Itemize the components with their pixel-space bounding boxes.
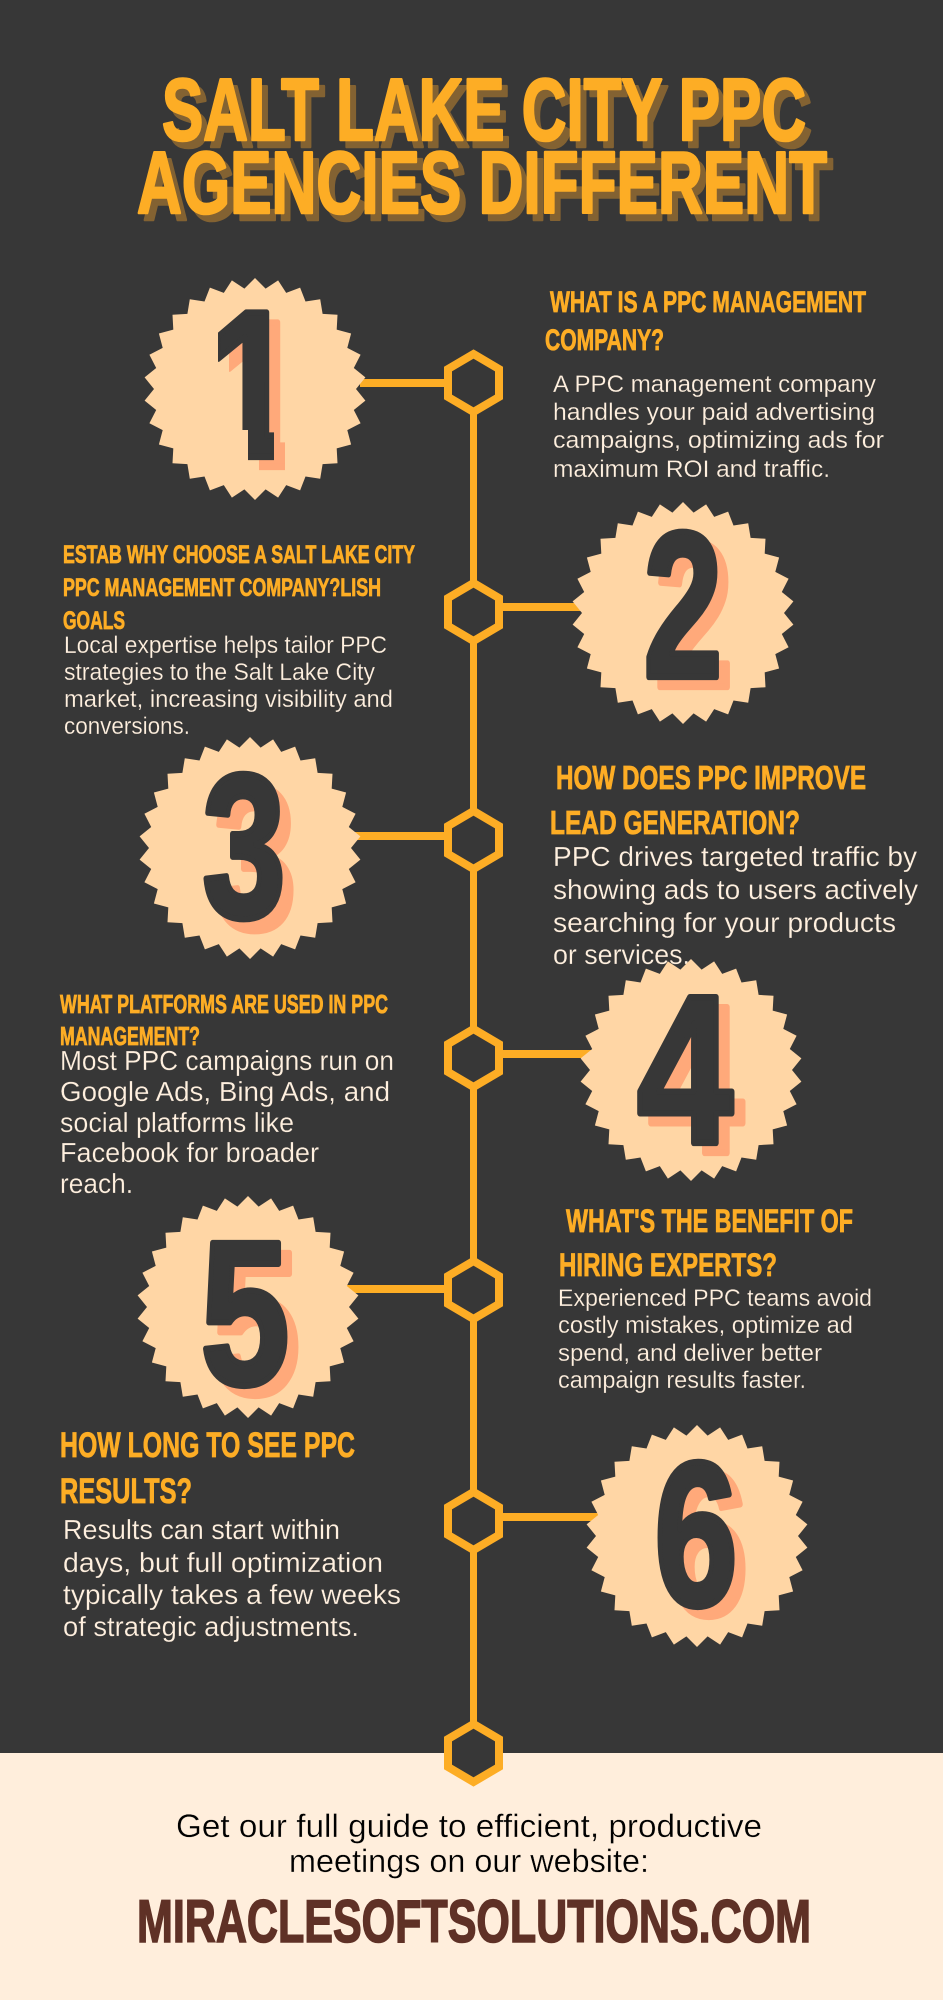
- step 5 text: [558, 1203, 872, 1394]
- step 4 heading: [60, 989, 388, 1051]
- step 2 heading: GOALS: [63, 607, 125, 635]
- connector arm 5: [345, 1285, 446, 1293]
- step 6 heading: HOW LONG TO SEE PPC: [60, 1426, 355, 1465]
- step 2 body: market, increasing visibility and: [64, 686, 393, 713]
- step 6 body: [63, 1514, 401, 1642]
- step 5 body: costly mistakes, optimize ad: [558, 1312, 853, 1339]
- number badge 1: 1: [219, 277, 307, 512]
- number badge 1: 1: [208, 267, 296, 502]
- step 2 body: conversions.: [64, 713, 190, 740]
- number badge 4: 4: [637, 951, 733, 1188]
- number badge 3: 3: [202, 732, 286, 962]
- panel: footer: [0, 1753, 943, 2000]
- number badge 2: 2: [655, 499, 733, 731]
- step 1 heading: [545, 286, 866, 357]
- step 3 text: [550, 759, 918, 970]
- step 6 body: typically takes a few weeks: [63, 1579, 401, 1610]
- step 3 heading: LEAD GENERATION?: [550, 804, 800, 841]
- title: [137, 60, 833, 239]
- step 2 heading: ESTAB WHY CHOOSE A SALT LAKE CITY: [63, 541, 415, 569]
- number badge 4: 4: [648, 961, 744, 1198]
- number badge 5: 5: [201, 1199, 289, 1427]
- step 6 text: [60, 1426, 401, 1642]
- step 6 body: days, but full optimization: [63, 1547, 383, 1578]
- step 4 body: social platforms like: [60, 1107, 294, 1138]
- step 2 body: strategies to the Salt Lake City: [64, 659, 375, 686]
- footer call to action: meetings on our website:: [289, 1843, 649, 1879]
- number badge 3: 3: [213, 744, 297, 974]
- step 4 body: Most PPC campaigns run on: [60, 1045, 394, 1076]
- step 6 heading: [60, 1426, 355, 1511]
- number badge 6: 6: [654, 1420, 738, 1650]
- connector arm 4: [501, 1050, 591, 1058]
- node hexagon 3: [448, 811, 499, 869]
- step 4 body: Facebook for broader: [60, 1137, 319, 1168]
- step 5 body: [558, 1285, 872, 1394]
- number badge 2: [573, 489, 793, 731]
- step 3 body: showing ads to users actively: [553, 874, 918, 905]
- footer call to action: [176, 1808, 762, 1879]
- step 1 heading: COMPANY?: [545, 324, 664, 357]
- step 2 text: [63, 541, 415, 740]
- connector arm 1: [360, 379, 446, 387]
- timeline spine: [470, 390, 477, 1730]
- step 5 body: spend, and deliver better: [558, 1340, 822, 1367]
- connector arm 2: [501, 603, 581, 611]
- step 5 heading: HIRING EXPERTS?: [559, 1247, 777, 1283]
- step 1 body: maximum ROI and traffic.: [553, 456, 830, 483]
- step 2 heading: [63, 541, 415, 635]
- step 5 body: Experienced PPC teams avoid: [558, 1285, 872, 1312]
- step 1 body: campaigns, optimizing ads for: [553, 427, 884, 454]
- step 3 body: searching for your products: [553, 907, 896, 938]
- step 3 heading: [550, 759, 866, 841]
- node hexagon 7: [448, 1724, 499, 1782]
- number badge 5: 5: [212, 1209, 300, 1437]
- number badge 6: [587, 1420, 807, 1660]
- number badge 6: 6: [665, 1430, 749, 1660]
- step 4 body: [60, 1045, 394, 1199]
- step 1 text: [545, 286, 884, 483]
- number badge 1: [145, 267, 365, 512]
- node hexagon 2: [448, 583, 499, 641]
- number badge 4: [581, 951, 801, 1198]
- footer call to action: Get our full guide to efficient, productive: [176, 1808, 762, 1844]
- step 6 body: Results can start within: [63, 1514, 340, 1545]
- step 5 body: campaign results faster.: [558, 1367, 806, 1394]
- step 4 body: reach.: [60, 1168, 133, 1199]
- step 6 heading: RESULTS?: [60, 1472, 192, 1511]
- node hexagon 6: [448, 1492, 499, 1550]
- step 1 body: handles your paid advertising: [553, 399, 875, 426]
- number badge 5: [138, 1196, 358, 1437]
- step 1 body: A PPC management company: [553, 371, 876, 398]
- step 3 body: [553, 841, 918, 970]
- step 1 body: [553, 371, 884, 483]
- step 2 heading: PPC MANAGEMENT COMPANY?LISH: [63, 574, 381, 602]
- step 3 body: PPC drives targeted traffic by: [553, 841, 917, 872]
- step 4 heading: WHAT PLATFORMS ARE USED IN PPC: [60, 989, 388, 1019]
- step 5 heading: [559, 1203, 853, 1283]
- step 4 body: Google Ads, Bing Ads, and: [60, 1076, 390, 1107]
- node hexagon 1: [448, 354, 499, 412]
- number badge 2: 2: [644, 489, 722, 721]
- step 2 body: [64, 632, 393, 740]
- number badge 3: [140, 732, 360, 974]
- node hexagon 4: [448, 1029, 499, 1087]
- connector arm 6: [501, 1513, 601, 1521]
- step 2 body: Local expertise helps tailor PPC: [64, 632, 387, 659]
- step 4 text: [60, 989, 394, 1199]
- step 4 heading: MANAGEMENT?: [60, 1021, 200, 1051]
- step 6 body: of strategic adjustments.: [63, 1611, 359, 1642]
- step 3 body: or services.: [553, 939, 690, 970]
- node hexagon 5: [448, 1261, 499, 1319]
- connector arm 3: [350, 832, 446, 840]
